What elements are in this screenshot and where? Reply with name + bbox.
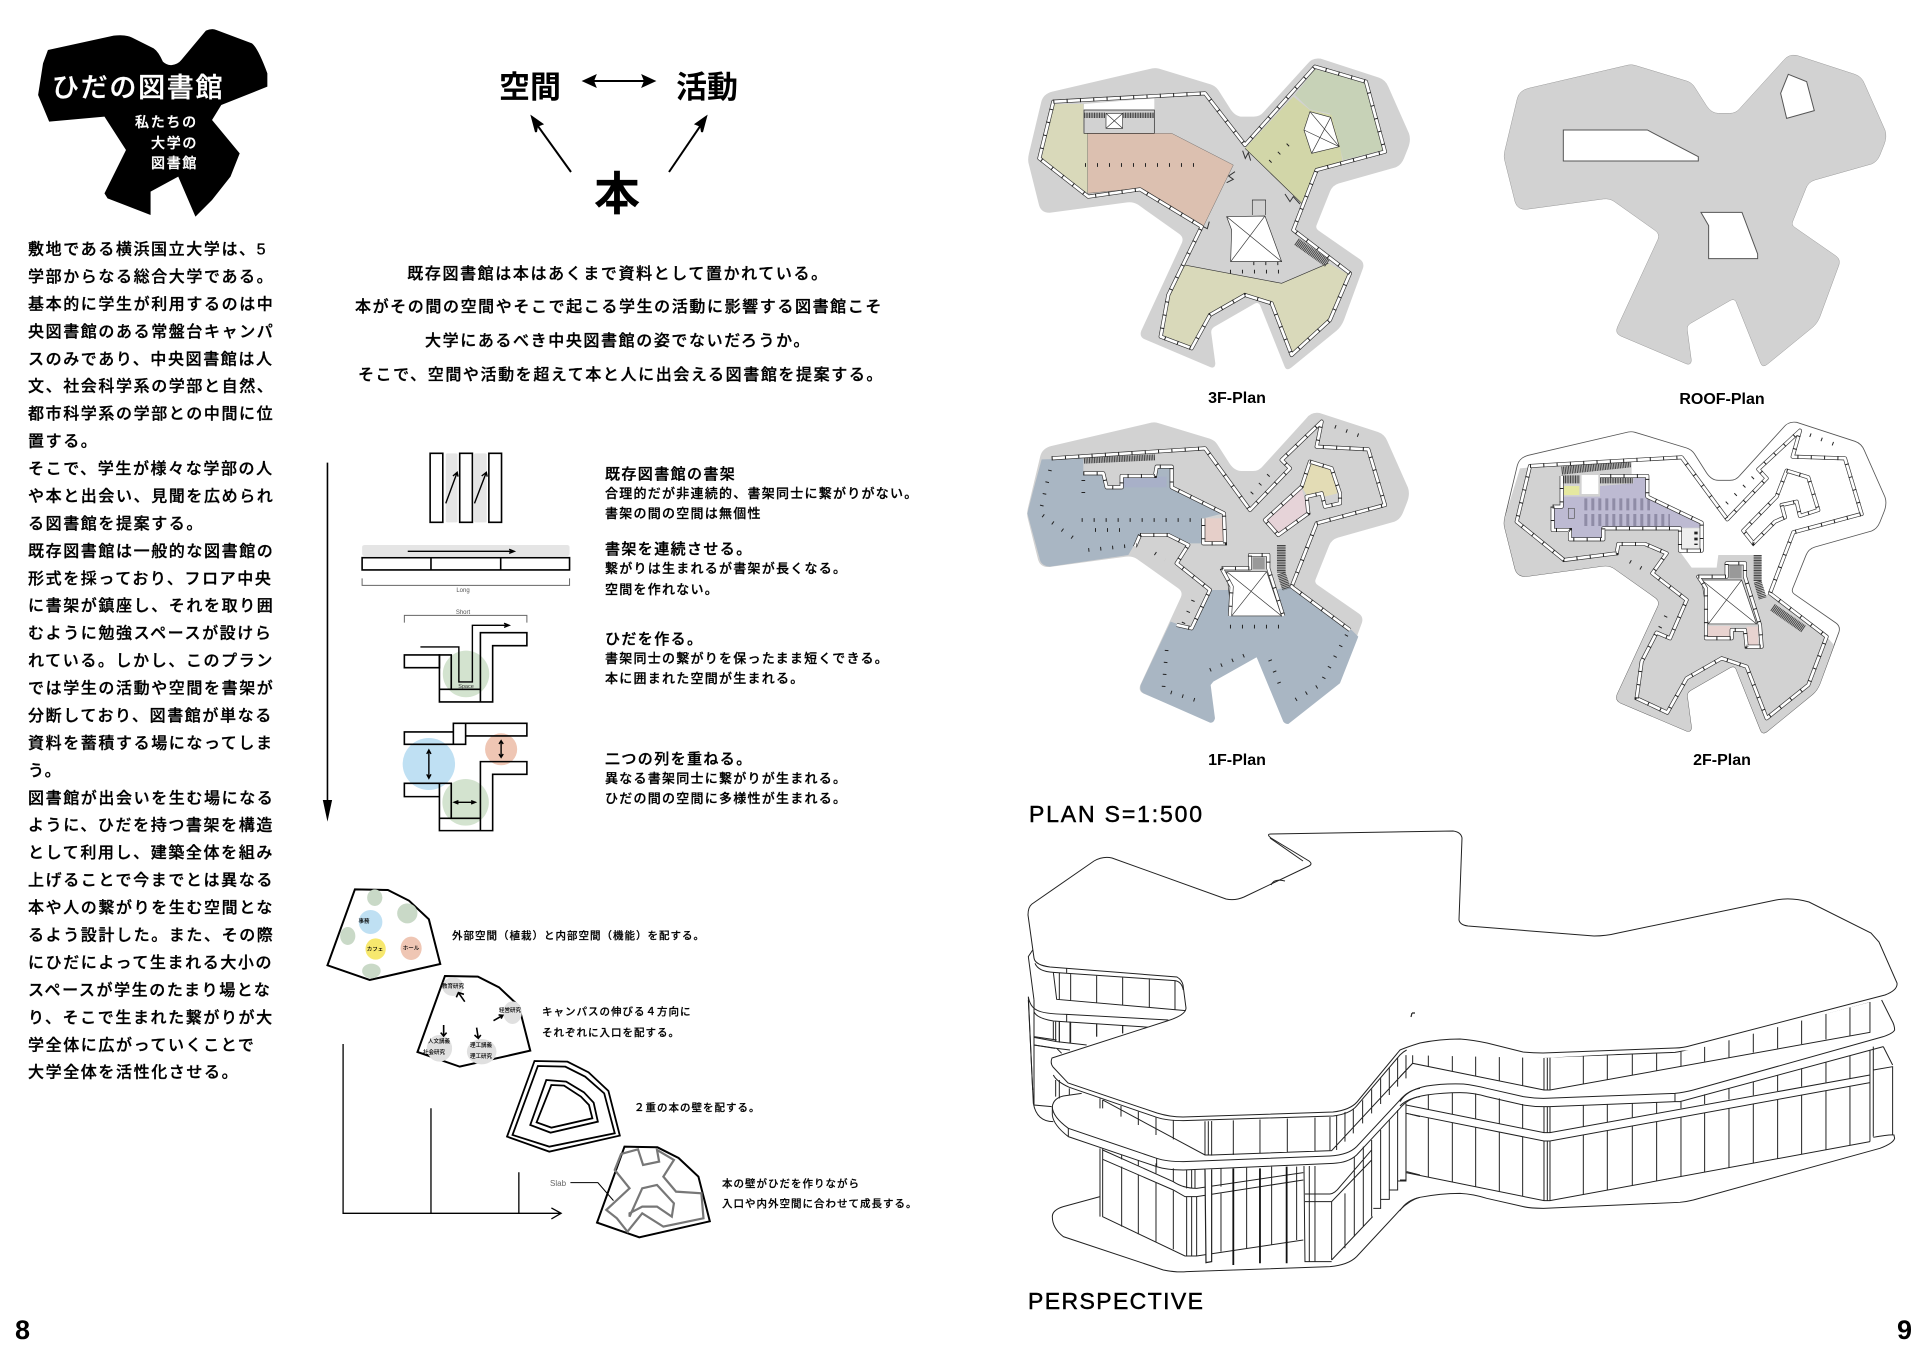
- heading: PLAN S=1:500: PLAN S=1:500: [1029, 801, 1204, 827]
- text block: main body copy: り、そこで生まれた繋がりが大: [28, 1008, 274, 1027]
- arrow: book to space: [532, 117, 571, 172]
- text block: bookshelf explanation 3: [605, 631, 889, 686]
- ticks: [1630, 435, 1843, 628]
- label: space: 空間: [499, 70, 561, 105]
- text block: massing explanations: ２重の本の壁を配する。: [634, 1101, 760, 1114]
- step 1: parallel shelves: [430, 453, 502, 522]
- text block: bookshelf explanation 4: ひだの間の空間に多様性が生まれる。: [605, 791, 847, 806]
- text block: centre statement: 大学にあるべき中央図書館の姿でないだろうか。: [425, 332, 811, 350]
- label: activity: 活動: [676, 70, 738, 105]
- text block: main body copy: スペースが学生のたまり場とな: [28, 980, 272, 999]
- diagram: massing steps: [327, 889, 710, 1237]
- text block: bookshelf explanation 3: 本に囲まれた空間が生まれる。: [605, 671, 805, 686]
- front walls, slabs and columns: [1028, 1000, 1420, 1272]
- title: ひだの図書館 logo blob: [38, 29, 267, 217]
- label: 2F-Plan: 2F-Plan: [1693, 752, 1751, 769]
- text block: main body copy: 図書館が出会いを生む場になる: [28, 788, 274, 807]
- small labels in massing diagram: 教育研究: [442, 982, 464, 990]
- small labels in massing diagram: カフェ: [367, 946, 383, 953]
- book wall: [1039, 67, 1385, 355]
- small labels in massing diagram: 事務: [358, 917, 370, 925]
- roof slab: [1028, 831, 1897, 1122]
- blob shape: [38, 29, 267, 217]
- voids and stairs: [1084, 98, 1339, 263]
- step B: four entrances: [417, 976, 530, 1067]
- small label: Long: Long: [456, 588, 470, 594]
- text block: main body copy: や本と出会い、見聞を広められ: [28, 487, 274, 505]
- label: 3F-Plan: 3F-Plan: [1208, 390, 1266, 407]
- text block: bookshelf explanation 2: 繋がりは生まれるが書架が長くなる。: [605, 561, 847, 576]
- text block: main body copy: れている。しかし、このプラン: [28, 652, 274, 670]
- blue reading areas: [1027, 458, 1358, 724]
- text block: massing explanations: それぞれに入口を配する。: [542, 1027, 680, 1039]
- text block: main body copy: 既存図書館は一般的な図書館の: [28, 542, 274, 560]
- plan: 1F: [1027, 413, 1409, 724]
- text block: bookshelf explanation 1: 書架の間の空間は無個性: [605, 506, 762, 521]
- roof slab: [1504, 55, 1886, 366]
- small label: Slab: Slab: [550, 1179, 567, 1188]
- text block: main body copy: に書架が鎮座し、それを取り囲: [28, 596, 274, 615]
- page number 9: 9: [1897, 1315, 1912, 1345]
- slab outline: [1027, 413, 1409, 724]
- grey floor: [1504, 459, 1834, 733]
- small labels in massing diagram: ホール: [403, 945, 420, 952]
- text block: main body copy: 都市科学系の学部との中間に位: [28, 405, 274, 423]
- heading: PERSPECTIVE: PERSPECTIVE: [1028, 1288, 1205, 1314]
- text block: massing explanations: [452, 929, 918, 1210]
- columns: [1085, 138, 1295, 272]
- text block: bookshelf explanation 2: 空間を作れない。: [605, 582, 719, 597]
- page number 8: 8: [15, 1315, 30, 1345]
- text block: bookshelf explanation 1: [605, 466, 919, 521]
- stairs upper left: [1084, 457, 1155, 461]
- small labels in massing diagram: 経営研究: [499, 1006, 521, 1014]
- text block: main body copy: 基本的に学生が利用するのは中: [28, 294, 274, 313]
- right wing walls and slabs: [1400, 1000, 1895, 1211]
- text block: main body copy: 大学全体を活性化させる。: [28, 1064, 239, 1082]
- text block: main body copy: 学部からなる総合大学である。: [28, 268, 274, 286]
- text block: bookshelf explanation 1: 既存図書館の書架: [605, 466, 736, 483]
- outline: [1504, 422, 1886, 733]
- text block: bookshelf explanation 4: 異なる書架同士に繋がりが生まれる。: [605, 771, 847, 786]
- subtitle: 図書館: [151, 155, 198, 171]
- roof openings: [1563, 74, 1814, 259]
- rear left terraces: [1028, 950, 1186, 1090]
- text block: main body copy: る図書館を提案する。: [28, 515, 204, 533]
- arrow: space to activity: [584, 76, 654, 86]
- rooms and void: [1564, 475, 1758, 645]
- text block: centre statement: そこで、空間や活動を超えて本と人に出会える図書館を提案する。: [358, 366, 884, 384]
- text block: bookshelf explanation 3: ひだを作る。: [605, 631, 703, 648]
- text block: main body copy: では学生の活動や空間を書架が: [28, 679, 274, 698]
- text block: massing explanations: 外部空間（植栽）と内部空間（機能）を配する。: [452, 929, 705, 942]
- perspective drawing: [1028, 831, 1897, 1272]
- text block: centre statement: [355, 265, 884, 384]
- step 3: fold: [404, 615, 527, 702]
- small label: Space: Space: [458, 684, 474, 690]
- text block: bookshelf explanation 4: 二つの列を重ねる。: [605, 751, 753, 768]
- text block: main body copy: 形式を採っており、フロア中央: [28, 570, 272, 588]
- text block: bookshelf explanation 2: 書架を連続させる。: [605, 540, 753, 558]
- text block: massing explanations: 入口や内外空間に合わせて成長する。: [722, 1197, 918, 1210]
- plan: ROOF: [1504, 55, 1886, 366]
- text block: massing explanations: 本の壁がひだを作りながら: [722, 1177, 860, 1190]
- book walls: [1517, 431, 1862, 718]
- text block: main body copy: にひだによって生まれる大小の: [28, 954, 273, 972]
- diagram: bookshelf evolution: [323, 453, 570, 831]
- text block: main body copy: 資料を蓄積する場になってしま: [28, 734, 274, 752]
- text block: main body copy: う。: [28, 763, 62, 780]
- text block: centre statement: 本がその間の空間やそこで起こる学生の活動に影響する図書館こそ: [355, 297, 883, 316]
- label: book: 本: [594, 168, 640, 220]
- rooms: [1122, 463, 1337, 569]
- small labels in massing diagram: 理工講義: [470, 1041, 492, 1049]
- text block: main body copy: 上げることで今までとは異なる: [28, 872, 274, 890]
- text block: main body copy: 央図書館のある常盤台キャンパ: [28, 323, 274, 341]
- text block: main body copy: 文、社会科学系の学部と自然、: [28, 378, 274, 396]
- plan: 2F: [1504, 422, 1886, 733]
- programme areas: [1042, 69, 1383, 353]
- book walls: [1052, 422, 1385, 630]
- progression lines and arrow: [343, 1044, 561, 1219]
- arrow: long vertical progression: [323, 463, 332, 822]
- text block: bookshelf explanation 1: 合理的だが非連続的、書架同士に繋がりがない。: [605, 486, 919, 501]
- text block: massing explanations: キャンパスの伸びる４方向に: [542, 1005, 692, 1018]
- plan: 3F: [1028, 58, 1410, 369]
- small label: Short: Short: [456, 610, 471, 616]
- subtitle: 私たちの: [135, 114, 198, 130]
- text block: bookshelf explanation 4: [605, 751, 847, 806]
- small labels in massing diagram: 社会研究: [423, 1048, 445, 1056]
- slab outline: [1028, 58, 1410, 369]
- stairs: [1281, 545, 1287, 589]
- text block: main body copy: ように、ひだを持つ書架を構造: [28, 817, 274, 835]
- main title: ひだの図書館: [52, 73, 224, 103]
- text block: bookshelf explanation 3: 書架同士の繋がりを保ったまま短くできる。: [605, 651, 889, 666]
- text block: main body copy: 敷地である横浜国立大学は、5: [28, 240, 267, 258]
- text block: centre statement: 既存図書館は本はあくまで資料として置かれている。: [407, 265, 829, 283]
- void: [1227, 572, 1282, 616]
- concept diagram: space, activity, book: [499, 70, 738, 220]
- text block: main body copy: 学全体に広がっていくことで: [28, 1035, 256, 1054]
- step 4: double rows: [403, 723, 527, 831]
- stairs: [1562, 463, 1804, 629]
- columns and ticks: [1040, 427, 1367, 705]
- subtitle: [135, 114, 198, 171]
- step C: double book wall: [507, 1061, 620, 1152]
- text block: main body copy: として利用し、建築全体を組み: [28, 844, 274, 862]
- label: 1F-Plan: 1F-Plan: [1208, 752, 1266, 769]
- text block: main body copy: むように勉強スペースが設けら: [28, 624, 272, 643]
- small labels in massing diagram: 理工研究: [470, 1052, 492, 1060]
- text block: main body copy: そこで、学生が様々な学部の人: [28, 459, 274, 478]
- library stack room: [1553, 476, 1701, 538]
- text block: main body copy: るよう設計した。また、その際: [28, 926, 274, 944]
- subtitle: 大学の: [151, 135, 198, 151]
- text block: main body copy: 分断しており、図書館が単なる: [28, 706, 273, 725]
- step A: exterior and interior placement: [327, 889, 440, 980]
- step 2: continuous shelf: [362, 545, 570, 585]
- text block: bookshelf explanation 2: [605, 540, 847, 597]
- small labels in massing diagram: 人文講義: [428, 1037, 450, 1045]
- arrow: book to activity: [669, 117, 706, 172]
- text block: main body copy: 本や人の繋がりを生む空間とな: [28, 898, 274, 917]
- step D: folding wall: [570, 1147, 710, 1237]
- text block: main body copy: スのみであり、中央図書館は人: [28, 350, 274, 368]
- small labels in massing diagram: [358, 917, 521, 1060]
- label: ROOF-Plan: ROOF-Plan: [1679, 391, 1765, 408]
- text block: main body copy: 置する。: [28, 433, 98, 451]
